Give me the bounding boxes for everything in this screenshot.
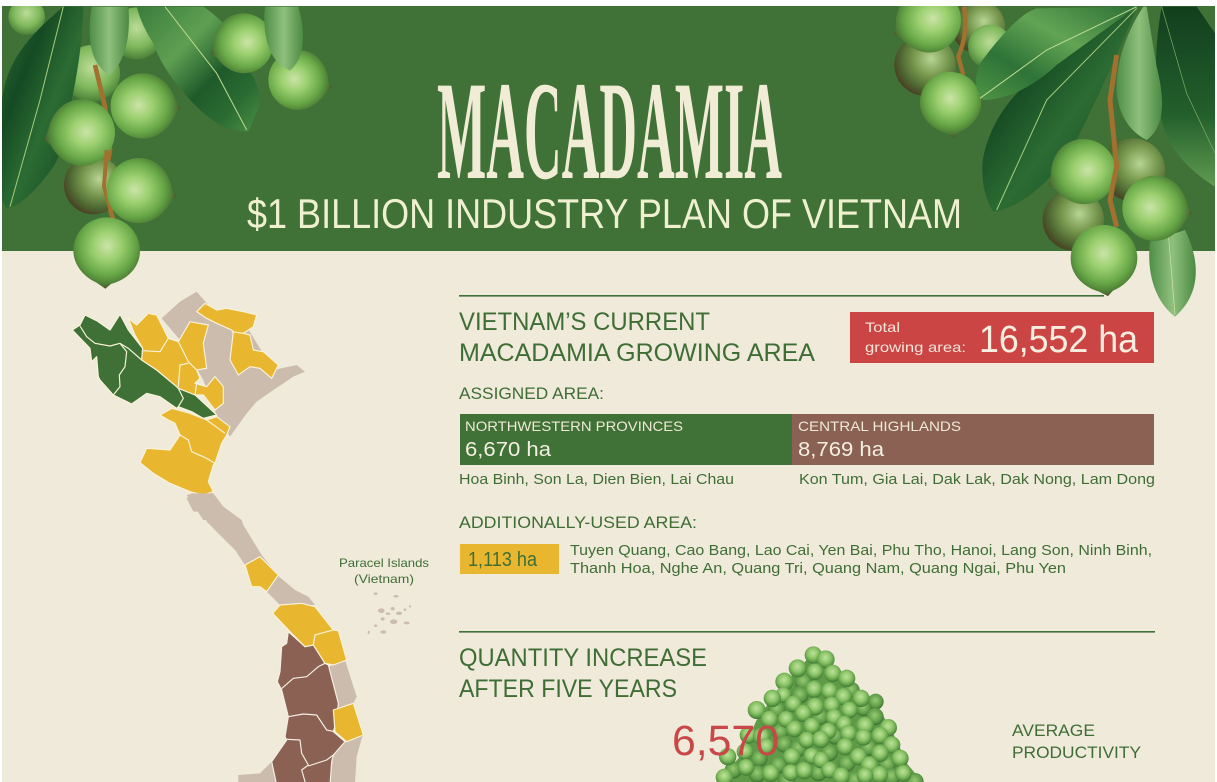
heading: growing area: VIETNAM’S CURRENT [459, 308, 710, 336]
label: average productivity: AVERAGE [1012, 721, 1095, 740]
text: additional province list: Thanh Hoa, Nghe An, Quang Tri, Quang Nam, Quang Ngai, Phu Yen [570, 560, 1066, 577]
bar: northwestern provinces: NORTHWESTERN PROVINCES [465, 418, 683, 434]
bar: northwestern provinces: 6,670 ha [465, 439, 552, 461]
callout: total growing area: growing area: [865, 339, 966, 355]
heading: quantity increase [459, 644, 707, 703]
number: 6,570: 6,570 [672, 717, 779, 765]
map: central and highland provinces [187, 493, 363, 782]
callout: total growing area: Total [865, 319, 900, 335]
label: average productivity: PRODUCTIVITY [1012, 743, 1141, 762]
text: additional province list [570, 542, 1152, 577]
map label: Paracel Islands: (Vietnam) [354, 572, 414, 586]
map: northern provinces [72, 292, 305, 520]
text: additional province list: Tuyen Quang, Cao Bang, Lao Cai, Yen Bai, Phu Tho, Hanoi, Lang Son, Ninh Binh, [570, 542, 1152, 559]
heading: additionally-used area: ADDITIONALLY-USED AREA: [459, 513, 697, 532]
panel: quantity increase [459, 644, 1141, 782]
bar: central highlands: CENTRAL HIGHLANDS [798, 418, 961, 434]
heading: quantity increase: AFTER FIVE YEARS [459, 675, 677, 703]
text: northwestern province list: Hoa Binh, Son La, Dien Bien, Lai Chau [459, 471, 734, 488]
heading: growing area [459, 308, 815, 367]
illustration: pile of macadamia nuts [713, 646, 927, 782]
callout: additional area [460, 544, 559, 574]
map of Vietnam [72, 292, 363, 782]
heading: quantity increase: QUANTITY INCREASE [459, 644, 707, 672]
illustration: right macadamia branch [882, 0, 1215, 317]
heading: growing area: MACADAMIA GROWING AREA [459, 339, 815, 367]
map label: Paracel Islands: Paracel Islands [339, 556, 429, 570]
bar: central highlands [792, 414, 1154, 465]
panel: green header band [2, 6, 1215, 251]
text: central highlands province list: Kon Tum, Gia Lai, Dak Lak, Dak Nong, Lam Dong [799, 471, 1155, 488]
heading: assigned area: ASSIGNED AREA: [459, 384, 604, 403]
icon: Paracel island specks [368, 592, 411, 634]
panel: growing area [459, 308, 1155, 577]
callout: additional area: 1,113 ha [468, 549, 538, 571]
bar: central highlands: 8,769 ha [798, 439, 885, 461]
subtitle: $1 BILLION INDUSTRY PLAN OF VIETNAM [247, 190, 962, 237]
illustration: left macadamia branch [2, 0, 339, 291]
bar: northwestern provinces [460, 414, 792, 465]
callout: total growing area [850, 312, 1154, 363]
map label: Paracel Islands [339, 556, 429, 586]
callout: total growing area: 16,552 ha [979, 319, 1139, 361]
label: average productivity [1012, 721, 1141, 762]
